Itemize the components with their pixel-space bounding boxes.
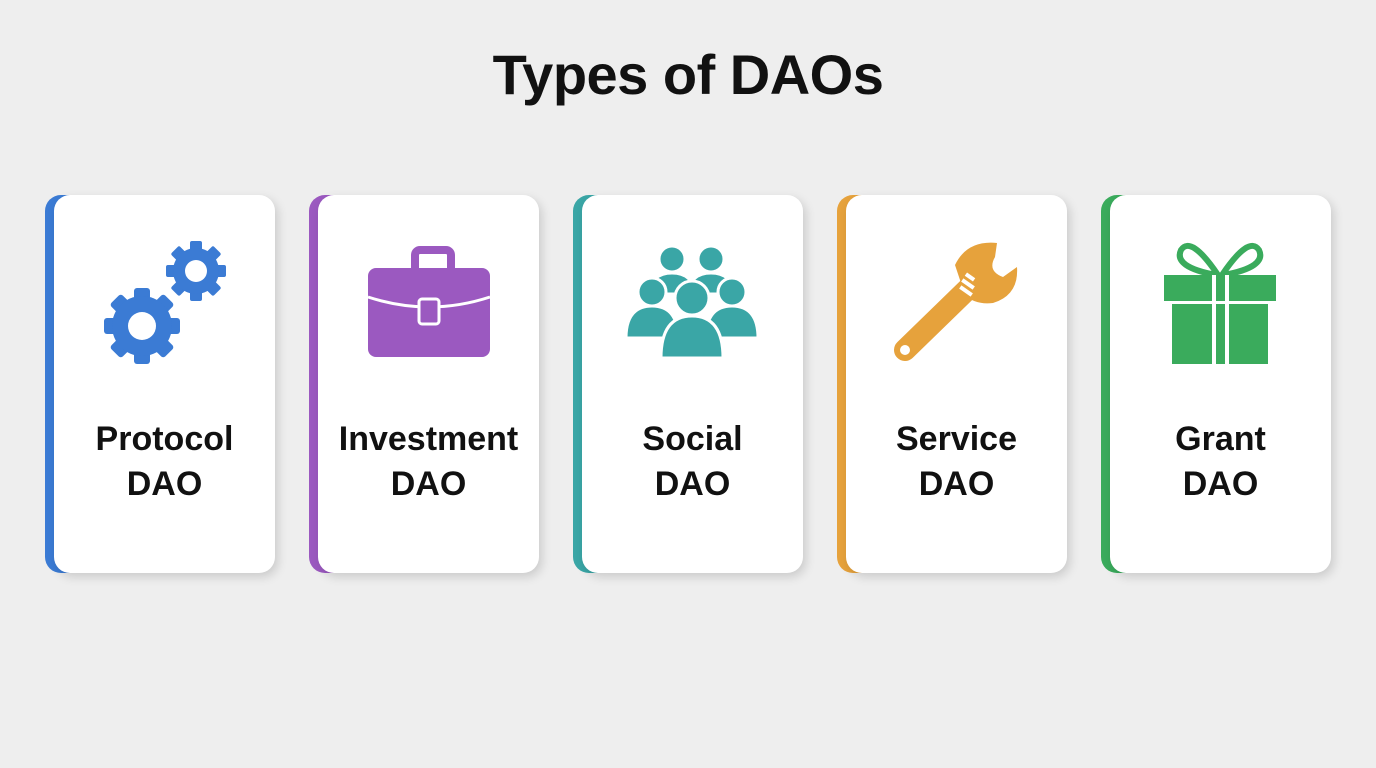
text: Grant DAO: Grant [1175,420,1266,458]
icon: gift [1164,242,1276,364]
text: Social DAO: Social [642,420,743,458]
panel: Service DAO [837,195,1074,580]
text: Service DAO [896,420,1017,503]
text: Investment DAO: DAO [391,465,466,503]
text: Social DAO [642,420,743,503]
text: Service DAO: Service [896,420,1017,458]
panel: Social DAO [573,195,810,580]
text: Investment DAO [339,420,518,503]
text: Protocol DAO [96,420,233,503]
icon: briefcase [368,246,490,357]
text: Service DAO: DAO [919,465,994,503]
text: Grant DAO: DAO [1183,465,1258,503]
panel: Grant DAO [1101,195,1338,580]
text: Social DAO: DAO [655,465,730,503]
title: Types of DAOs [493,43,883,106]
panel: Protocol DAO [45,195,282,580]
icon: gears [104,241,226,364]
text: Grant DAO [1175,420,1266,503]
panel: Investment DAO [309,195,546,580]
icon: wrench [894,242,1018,361]
text: Investment DAO: Investment [339,420,518,458]
icon: people [628,248,756,356]
text: Protocol DAO: DAO [127,465,202,503]
text: Protocol DAO: Protocol [96,420,233,458]
